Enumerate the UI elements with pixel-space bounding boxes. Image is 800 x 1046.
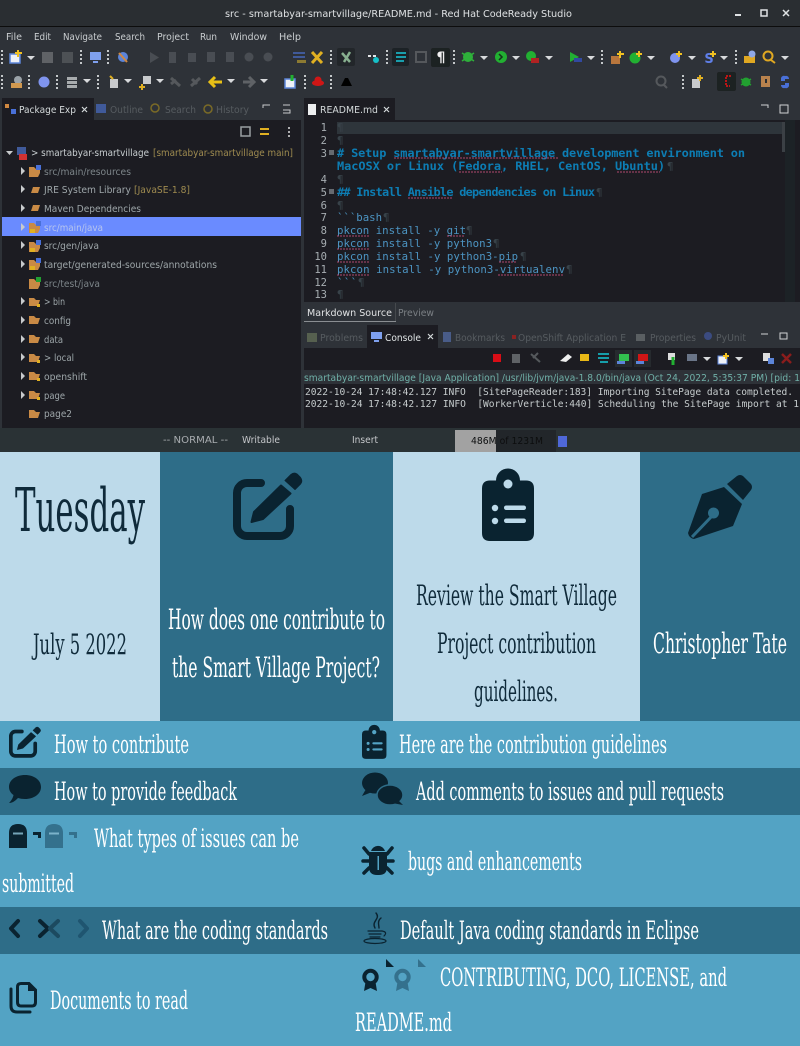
icon: java	[364, 913, 386, 944]
package explorer panel: Search	[165, 105, 196, 116]
package explorer panel	[2, 98, 301, 428]
markdown source text: ¶	[466, 224, 472, 237]
question label: How to provide feedback	[54, 777, 237, 806]
project tree: src/test/java	[44, 279, 100, 290]
console log output: 2022-10-24 17:48:42.127 INFO [WorkerVerticle:440] Scheduling the SitePage import at 1	[305, 399, 799, 410]
question label: Documents to read	[50, 986, 188, 1015]
line numbers: 13	[314, 289, 327, 301]
icon: issue markers	[9, 824, 77, 848]
menu bar: Window	[230, 32, 267, 43]
markdown source text: ¶	[566, 263, 572, 276]
hero panel: question	[160, 452, 393, 721]
question label: How to contribute	[54, 730, 189, 759]
icon: code chevrons	[11, 921, 87, 936]
question label: submitted	[2, 869, 74, 898]
title bar	[0, 0, 800, 27]
console panel	[304, 325, 800, 428]
markdown source text: ¶	[337, 121, 343, 134]
question text	[168, 603, 385, 684]
markdown source text: ¶	[337, 199, 343, 212]
console log output: 2022-10-24 17:48:42.127 INFO [SitePageReader:183] Importing SitePage data completed.	[305, 387, 793, 398]
markdown source text: pkcon install -y python3-virtualenv	[337, 263, 565, 276]
markdown source text: pkcon install -y git	[337, 224, 466, 237]
markdown source text: ¶	[493, 237, 499, 250]
icon: comments	[362, 772, 403, 805]
date text: July 5 2022	[31, 628, 127, 661]
project tree: src/main/java	[44, 223, 103, 234]
menu bar: Help	[279, 32, 301, 43]
project tree: [JavaSE-1.8]	[134, 185, 190, 196]
console panel: Properties	[650, 333, 696, 344]
icon: pen to square	[237, 473, 302, 536]
answer label: bugs and enhancements	[408, 847, 582, 876]
status bar	[0, 428, 800, 452]
menu bar: Edit	[34, 32, 51, 43]
icon: pen nib	[688, 475, 752, 539]
markdown source text: pkcon install -y python3	[337, 237, 492, 250]
toolbar row 2	[1, 72, 789, 91]
console panel: PyUnit	[716, 333, 746, 344]
spelling squiggles	[337, 158, 660, 275]
action text	[416, 579, 617, 708]
menu bar: Run	[200, 32, 217, 43]
markdown source text: ¶	[358, 276, 364, 289]
question text: How does one contribute to	[168, 603, 385, 636]
project tree: > bin	[44, 297, 65, 308]
line numbers: 12	[314, 277, 327, 289]
editor panel: README.md	[320, 105, 378, 116]
project tree: config	[44, 316, 71, 327]
icon: speech bubble	[9, 775, 41, 803]
markdown source text: MacOSX or Linux (Fedora, RHEL, CentOS, Ubuntu)	[337, 159, 665, 173]
markdown source text: ## Install Ansible dependencies on Linux	[337, 185, 595, 199]
console log output	[305, 387, 799, 410]
explorer toolbar	[241, 127, 290, 137]
project tree: openshift	[44, 372, 87, 383]
line numbers: 4	[321, 174, 327, 186]
project tree: data	[44, 335, 63, 346]
icon: documents	[11, 983, 36, 1012]
markdown source text: ¶	[337, 288, 343, 301]
IDE window screenshot	[0, 0, 800, 452]
menu bar	[6, 32, 301, 43]
console panel: Console	[385, 333, 421, 344]
markdown source text: ¶	[337, 173, 343, 186]
markdown source text: ```	[337, 276, 357, 289]
project tree: JRE System Library	[43, 185, 131, 196]
project tree: > local	[44, 353, 74, 364]
selected row	[2, 217, 301, 236]
package explorer panel: Package Exp	[19, 105, 76, 116]
line numbers: 7	[321, 212, 327, 224]
line numbers: 5	[321, 187, 327, 199]
line numbers: 2	[321, 135, 327, 147]
markdown source text	[337, 121, 745, 301]
icon: clipboard	[362, 725, 386, 759]
markdown source text: ¶	[383, 211, 389, 224]
status bar: -- NORMAL --	[163, 435, 228, 446]
project tree: target/generated-sources/annotations	[44, 260, 217, 271]
row: feedback	[0, 768, 800, 815]
row: documents	[0, 954, 800, 1046]
icon: edit	[11, 727, 41, 756]
editor panel	[304, 98, 800, 302]
markdown source text: ¶	[667, 160, 673, 173]
row: coding standards	[0, 907, 800, 954]
action text: Review the Smart Village	[416, 579, 617, 612]
project tree: [smartabyar-smartvillage main]	[153, 148, 293, 159]
markdown source text: ¶	[337, 134, 343, 147]
answer label: README.md	[355, 1008, 452, 1037]
line numbers: 11	[314, 264, 327, 276]
menu bar: Navigate	[63, 32, 102, 43]
status bar: 486M of 1231M	[471, 436, 543, 447]
hero panel: date	[0, 452, 160, 721]
heading: Tuesday: Tuesday	[15, 476, 145, 546]
markdown source text: ¶	[596, 186, 602, 199]
title bar: src - smartabyar-smartvillage/README.md - Red Hat CodeReady Studio	[225, 9, 572, 20]
icon: bug	[363, 846, 393, 875]
status bar: Insert	[352, 435, 378, 446]
menu bar: Search	[115, 32, 145, 43]
question label	[2, 824, 299, 898]
question text: the Smart Village Project?	[172, 651, 380, 684]
markdown source text: ¶	[520, 250, 526, 263]
question label: What are the coding standards	[102, 916, 328, 945]
package explorer panel: History	[216, 105, 249, 116]
project tree: page	[44, 391, 65, 402]
project tree: Maven Dependencies	[44, 204, 141, 215]
hero panel: action	[393, 452, 640, 721]
toolbar row 1	[1, 48, 789, 67]
editor mode tabs: Markdown Source	[307, 308, 392, 319]
icon: clipboard list	[482, 468, 534, 541]
toolbar row 1: ¶	[437, 50, 445, 66]
answer label	[355, 963, 727, 1037]
markdown source text: ```bash	[337, 211, 382, 224]
console panel: OpenShift Application E	[518, 333, 626, 344]
editor mode tabs	[304, 303, 434, 322]
line numbers: 10	[314, 251, 327, 263]
action text: guidelines.	[474, 675, 558, 708]
status bar: Writable	[242, 435, 280, 446]
line numbers: 1	[321, 122, 327, 134]
line numbers: 9	[321, 238, 327, 250]
markdown source text: # Setup smartabyar-smartvillage development environment on	[337, 146, 745, 160]
question label: What types of issues can be	[94, 824, 299, 853]
editor mode tabs: Preview	[398, 308, 434, 319]
line numbers: 6	[321, 200, 327, 212]
line numbers: 8	[321, 225, 327, 237]
package explorer panel: Outline	[110, 105, 143, 116]
project tree: src/gen/java	[44, 241, 99, 252]
markdown source text: pkcon install -y python3-pip	[337, 250, 518, 263]
action text: Project contribution	[437, 627, 596, 660]
row: how to contribute	[0, 721, 800, 768]
project tree: page2	[44, 409, 72, 420]
console panel: Problems	[320, 333, 363, 344]
console toolbar	[493, 350, 791, 367]
icon: awards	[364, 959, 426, 991]
project tree	[6, 147, 293, 420]
menu bar: File	[6, 32, 22, 43]
row: issues	[0, 815, 800, 907]
toolbar row 1: S	[704, 52, 714, 67]
console panel: Bookmarks	[455, 333, 505, 344]
tree icons	[21, 165, 41, 418]
project tree: src/main/resources	[44, 167, 131, 178]
line numbers: 3	[321, 148, 327, 160]
line numbers	[314, 122, 327, 301]
menu bar: Project	[157, 32, 189, 43]
project tree: > smartabyar-smartvillage	[31, 148, 149, 159]
hero panel: author	[640, 452, 800, 721]
